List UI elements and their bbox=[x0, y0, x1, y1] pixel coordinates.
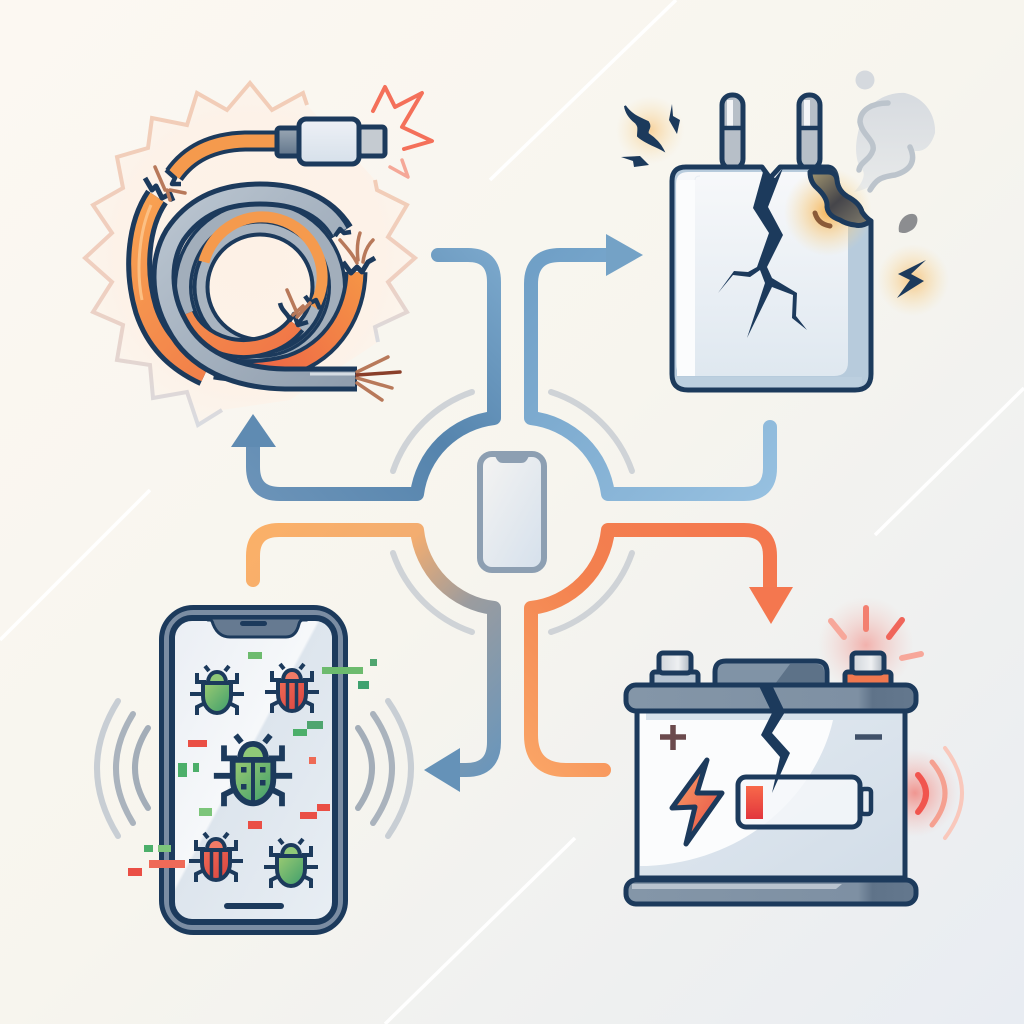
sparks left bbox=[616, 96, 684, 167]
terminals bbox=[652, 653, 891, 686]
centre cap bbox=[715, 661, 827, 686]
ash fleck bbox=[899, 214, 917, 233]
red alert glow and rays bbox=[818, 597, 921, 693]
arrow: hub to buggy phone bbox=[253, 530, 494, 792]
crack bbox=[718, 168, 807, 338]
battery body bbox=[637, 710, 905, 878]
orange outer wire, right bbox=[215, 258, 375, 371]
icon: central phone bbox=[480, 454, 544, 570]
exposed wire strands bbox=[155, 167, 400, 400]
smoke cloud bbox=[854, 70, 935, 192]
orange inner wire, left bbox=[139, 178, 205, 374]
panel: cracked burnt charger bbox=[616, 70, 949, 390]
charger prongs bbox=[722, 95, 820, 169]
coil rings bbox=[183, 210, 337, 364]
panel: frayed cable bbox=[85, 83, 432, 425]
crack bbox=[759, 686, 790, 793]
hub wave arcs bbox=[393, 392, 632, 632]
base bbox=[626, 880, 916, 904]
glitch pixels red bbox=[128, 740, 330, 876]
orange inner wire, lower bbox=[186, 303, 308, 348]
icons: bugs bbox=[189, 664, 319, 888]
arrow: hub to cracked charger bbox=[531, 234, 770, 494]
grey outer cable jacket bbox=[164, 194, 357, 379]
icon: low battery bbox=[738, 777, 871, 827]
starburst halo bbox=[85, 83, 415, 425]
arrow: hub to damaged battery bbox=[531, 530, 793, 770]
charger body bbox=[672, 167, 871, 390]
orange top wire segment bbox=[166, 141, 278, 184]
panel: buggy smartphone bbox=[97, 608, 411, 932]
red spark bbox=[373, 87, 432, 177]
burn mark bbox=[784, 168, 872, 256]
red warning waves bbox=[871, 748, 962, 838]
phone body bbox=[162, 608, 346, 932]
glitch pixels green bbox=[144, 652, 377, 852]
USB connector plug bbox=[277, 119, 385, 164]
lightning bolt right bbox=[877, 244, 949, 316]
minus sign bbox=[855, 734, 882, 740]
panel: damaged battery bbox=[626, 597, 962, 904]
plus sign bbox=[660, 725, 686, 750]
vibration waves bbox=[97, 701, 411, 836]
icon: lightning bolt bbox=[672, 760, 722, 844]
arrow: hub to frayed cable bbox=[231, 255, 494, 494]
central hub bbox=[393, 392, 632, 632]
lid bbox=[626, 685, 916, 711]
